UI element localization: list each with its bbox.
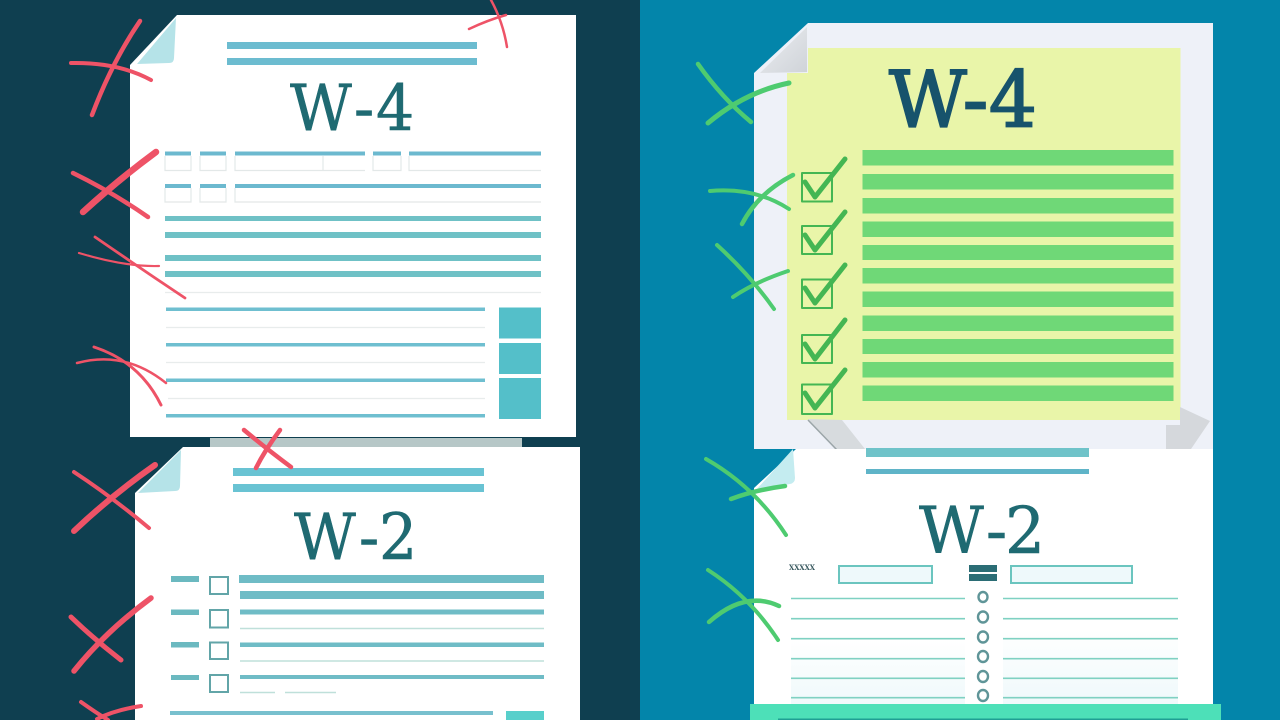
icon: green cross marks <box>698 64 793 640</box>
form field rows <box>165 152 541 202</box>
icon: folded corner <box>760 27 807 73</box>
panel: right correct side background <box>640 0 1280 720</box>
green cross two <box>710 175 793 224</box>
panel: left W-2 form <box>135 447 580 720</box>
checkbox one <box>802 159 845 202</box>
checkbox two <box>802 212 845 254</box>
panel: right W-2 form <box>754 448 1213 720</box>
checkbox five <box>802 370 845 414</box>
red cross row two <box>73 152 156 217</box>
red cross between forms <box>244 430 291 468</box>
red cross row three <box>79 237 185 298</box>
equals sign <box>969 565 997 581</box>
input boxes <box>839 566 1132 583</box>
small label: XXXXX <box>789 563 816 572</box>
header lines <box>866 448 1089 474</box>
header lines <box>233 468 484 492</box>
icon: bottom left curl <box>808 419 865 449</box>
red cross W-2 top <box>74 465 155 531</box>
red cross row four <box>77 347 166 405</box>
green cross three <box>717 245 788 309</box>
yellow highlight <box>787 48 1180 420</box>
heading: W-2: W-2 <box>919 494 1045 569</box>
checkboxes <box>802 159 845 414</box>
icon: red cross marks <box>71 0 507 720</box>
checkbox rows <box>170 575 544 720</box>
ruled lines <box>791 598 1178 698</box>
red cross W-2 middle <box>71 598 151 671</box>
checkbox three <box>802 265 845 308</box>
header lines <box>227 42 477 65</box>
shaded area <box>791 640 965 704</box>
strip between left forms <box>210 438 522 447</box>
green cross one <box>698 64 789 123</box>
green cross four <box>706 459 786 535</box>
heading: W-2: W-2 <box>294 499 417 574</box>
icon: folded corner <box>137 18 176 64</box>
green cross five <box>708 570 779 640</box>
heading: W-4: W-4 <box>889 55 1037 146</box>
green text bars <box>862 150 1174 401</box>
teal boxes column <box>499 308 541 419</box>
panel: left W-4 form <box>130 15 576 437</box>
icon: bottom right curl <box>1166 407 1210 449</box>
circles column <box>978 592 988 701</box>
red cross top right <box>469 0 507 47</box>
icon: folded corner <box>138 450 181 493</box>
panel: left incorrect side background <box>0 0 640 720</box>
checkbox four <box>802 320 845 363</box>
line table <box>165 292 541 418</box>
full-width text bars <box>165 216 541 277</box>
red cross top left <box>71 21 151 115</box>
heading: W-4: W-4 <box>290 70 414 145</box>
red cross W-2 bottom <box>81 702 141 720</box>
bottom green bar <box>750 704 1221 720</box>
panel: right W-4 form <box>754 23 1213 450</box>
icon: folded corner <box>756 449 795 490</box>
